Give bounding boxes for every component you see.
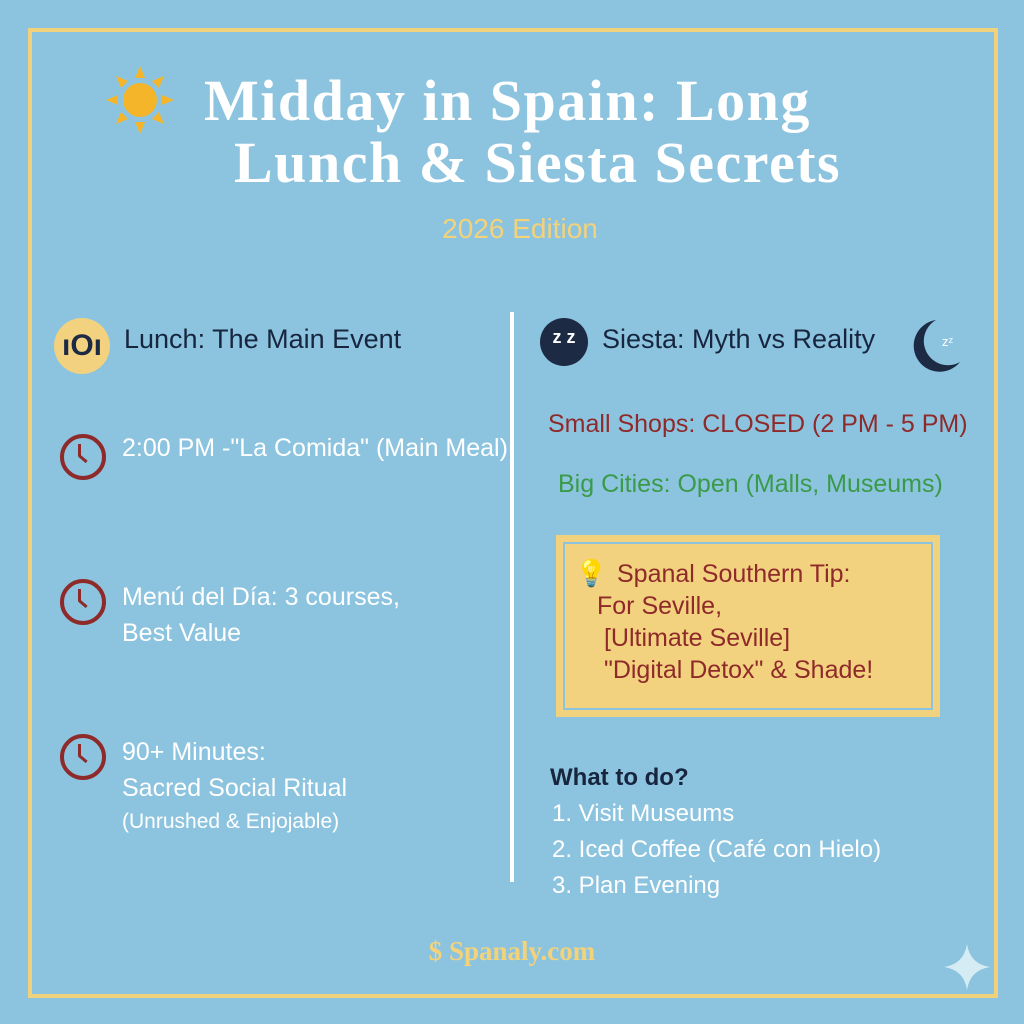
footer: $ Spanaly.com [429, 936, 595, 966]
item 1 [60, 434, 508, 480]
open big cities: Big Cities: Open (Malls, Museums) [558, 470, 943, 498]
what to do list: What to do? [550, 764, 689, 791]
icon: moon [914, 320, 960, 372]
title [204, 68, 841, 195]
subtitle: 2026 Edition [442, 213, 598, 244]
panel: lunch [54, 318, 508, 833]
icon: sun [106, 66, 174, 134]
item 3: Sacred Social Ritual [122, 774, 347, 802]
icon: sleepy face: z z [552, 327, 576, 347]
icon: sleepy face [540, 318, 588, 366]
icon: sparkle [944, 944, 990, 990]
panel: siesta: 1. Visit Museums [552, 800, 734, 827]
item 3: 90+ Minutes: [122, 738, 266, 766]
callout: tip box: [Ultimate Seville] [604, 624, 790, 652]
item 2: Menú del Día: 3 courses, [122, 583, 400, 611]
divider [510, 312, 514, 882]
panel: siesta [540, 318, 968, 899]
tip text: Spanal Southern Tip: [617, 560, 850, 588]
heading: siesta: Siesta: Myth vs Reality [602, 324, 875, 354]
title: Lunch & Siesta Secrets [234, 130, 841, 195]
item 2: Best Value [122, 619, 241, 647]
heading: lunch: Lunch: The Main Event [124, 324, 401, 354]
item 3: (Unrushed & Enjojable) [122, 810, 339, 833]
icon: moon: zᶻ [942, 334, 954, 349]
panel: siesta: 2. Iced Coffee (Café con Hielo) [552, 836, 881, 863]
icon: bulb: 💡 [575, 558, 607, 588]
panel: siesta: 3. Plan Evening [552, 872, 720, 899]
item 1: 2:00 PM -"La Comida" (Main Meal) [122, 434, 508, 462]
item 3 [60, 734, 347, 833]
icon: plate [54, 318, 110, 374]
callout: tip box [556, 535, 940, 717]
callout: tip box: "Digital Detox" & Shade! [604, 656, 873, 684]
icon: plate: ıOı [62, 329, 102, 362]
item 2 [60, 579, 400, 647]
title: Midday in Spain: Long [204, 68, 811, 133]
closed shops: Small Shops: CLOSED (2 PM - 5 PM) [548, 410, 968, 438]
callout: tip box: For Seville, [597, 592, 722, 620]
